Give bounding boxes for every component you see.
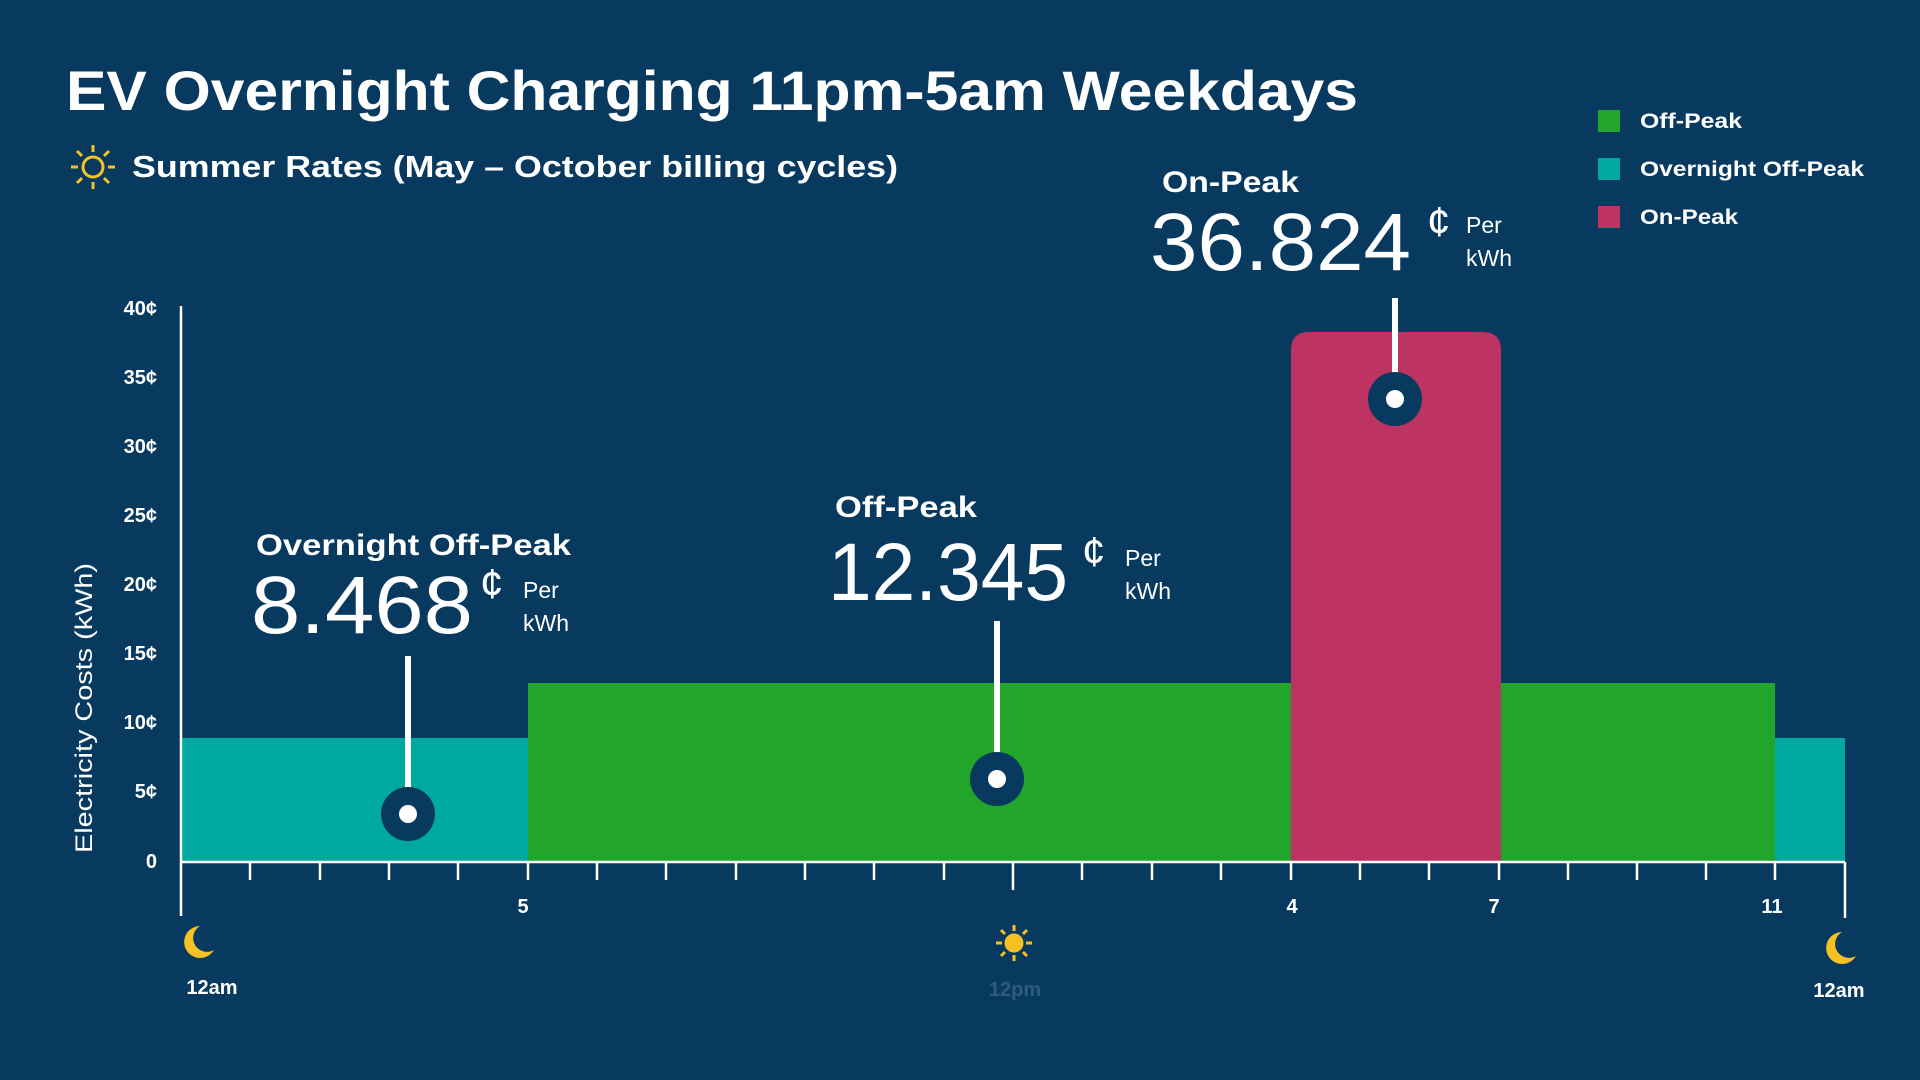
icon: moon right [1826, 932, 1856, 964]
callout: off-peak: ¢ [1082, 528, 1105, 575]
x axis labels: 7 [1488, 896, 1500, 918]
y axis labels: 5¢ [135, 781, 157, 803]
y axis labels: 20¢ [124, 574, 157, 596]
callout: off-peak: Off-Peak [835, 491, 977, 524]
icon: sun [71, 145, 115, 189]
legend: On-Peak [1640, 206, 1738, 229]
x axis labels [186, 896, 1865, 1002]
callout: off-peak: 12.345 [828, 527, 1068, 618]
callout: on-peak: ¢ [1427, 198, 1450, 245]
y axis labels: 15¢ [124, 643, 157, 665]
y axis title: Electricity Costs (kWh) [71, 563, 98, 853]
legend: Overnight Off-Peak [1640, 158, 1864, 181]
callout: on-peak: Per [1466, 212, 1502, 238]
subtitle: Summer Rates (May – October billing cycles) [132, 149, 898, 184]
callout: overnight off-peak: Overnight Off-Peak [256, 529, 571, 562]
title: EV Overnight Charging 11pm-5am Weekdays [66, 59, 1358, 122]
icon: sun 12pm [996, 925, 1032, 961]
callout: on-peak: On-Peak [1162, 166, 1299, 199]
y axis labels: 30¢ [124, 436, 157, 458]
callout: on-peak: kWh [1466, 245, 1512, 271]
legend [1598, 110, 1864, 229]
callout: overnight off-peak: Per [523, 577, 559, 603]
callout: off-peak: Per [1125, 545, 1161, 571]
bar chart [181, 332, 1845, 862]
x axis labels: 4 [1286, 896, 1298, 918]
y axis labels [124, 298, 157, 873]
callout: overnight off-peak [251, 529, 571, 841]
callout: on-peak: 36.824 [1150, 197, 1411, 288]
y axis labels: 10¢ [124, 712, 157, 734]
y axis labels: 40¢ [124, 298, 157, 320]
y axis labels: 25¢ [124, 505, 157, 527]
callout: off-peak: kWh [1125, 578, 1171, 604]
icon: moon left [184, 926, 214, 958]
y axis labels: 35¢ [124, 367, 157, 389]
callout: off-peak [828, 491, 1171, 806]
x axis labels: 12pm [989, 979, 1041, 1001]
callout: overnight off-peak: kWh [523, 610, 569, 636]
y axis labels: 0 [146, 851, 157, 873]
callout: overnight off-peak: 8.468 [251, 560, 473, 651]
axes [181, 306, 1845, 918]
x axis labels: 12am [186, 977, 238, 999]
x axis labels: 12am [1813, 980, 1865, 1002]
subtitle [71, 145, 898, 189]
callout: overnight off-peak: ¢ [480, 560, 503, 607]
x axis labels: 11 [1761, 896, 1783, 918]
x axis labels: 5 [517, 896, 529, 918]
callout: on-peak [1150, 166, 1512, 426]
legend: Off-Peak [1640, 110, 1742, 133]
